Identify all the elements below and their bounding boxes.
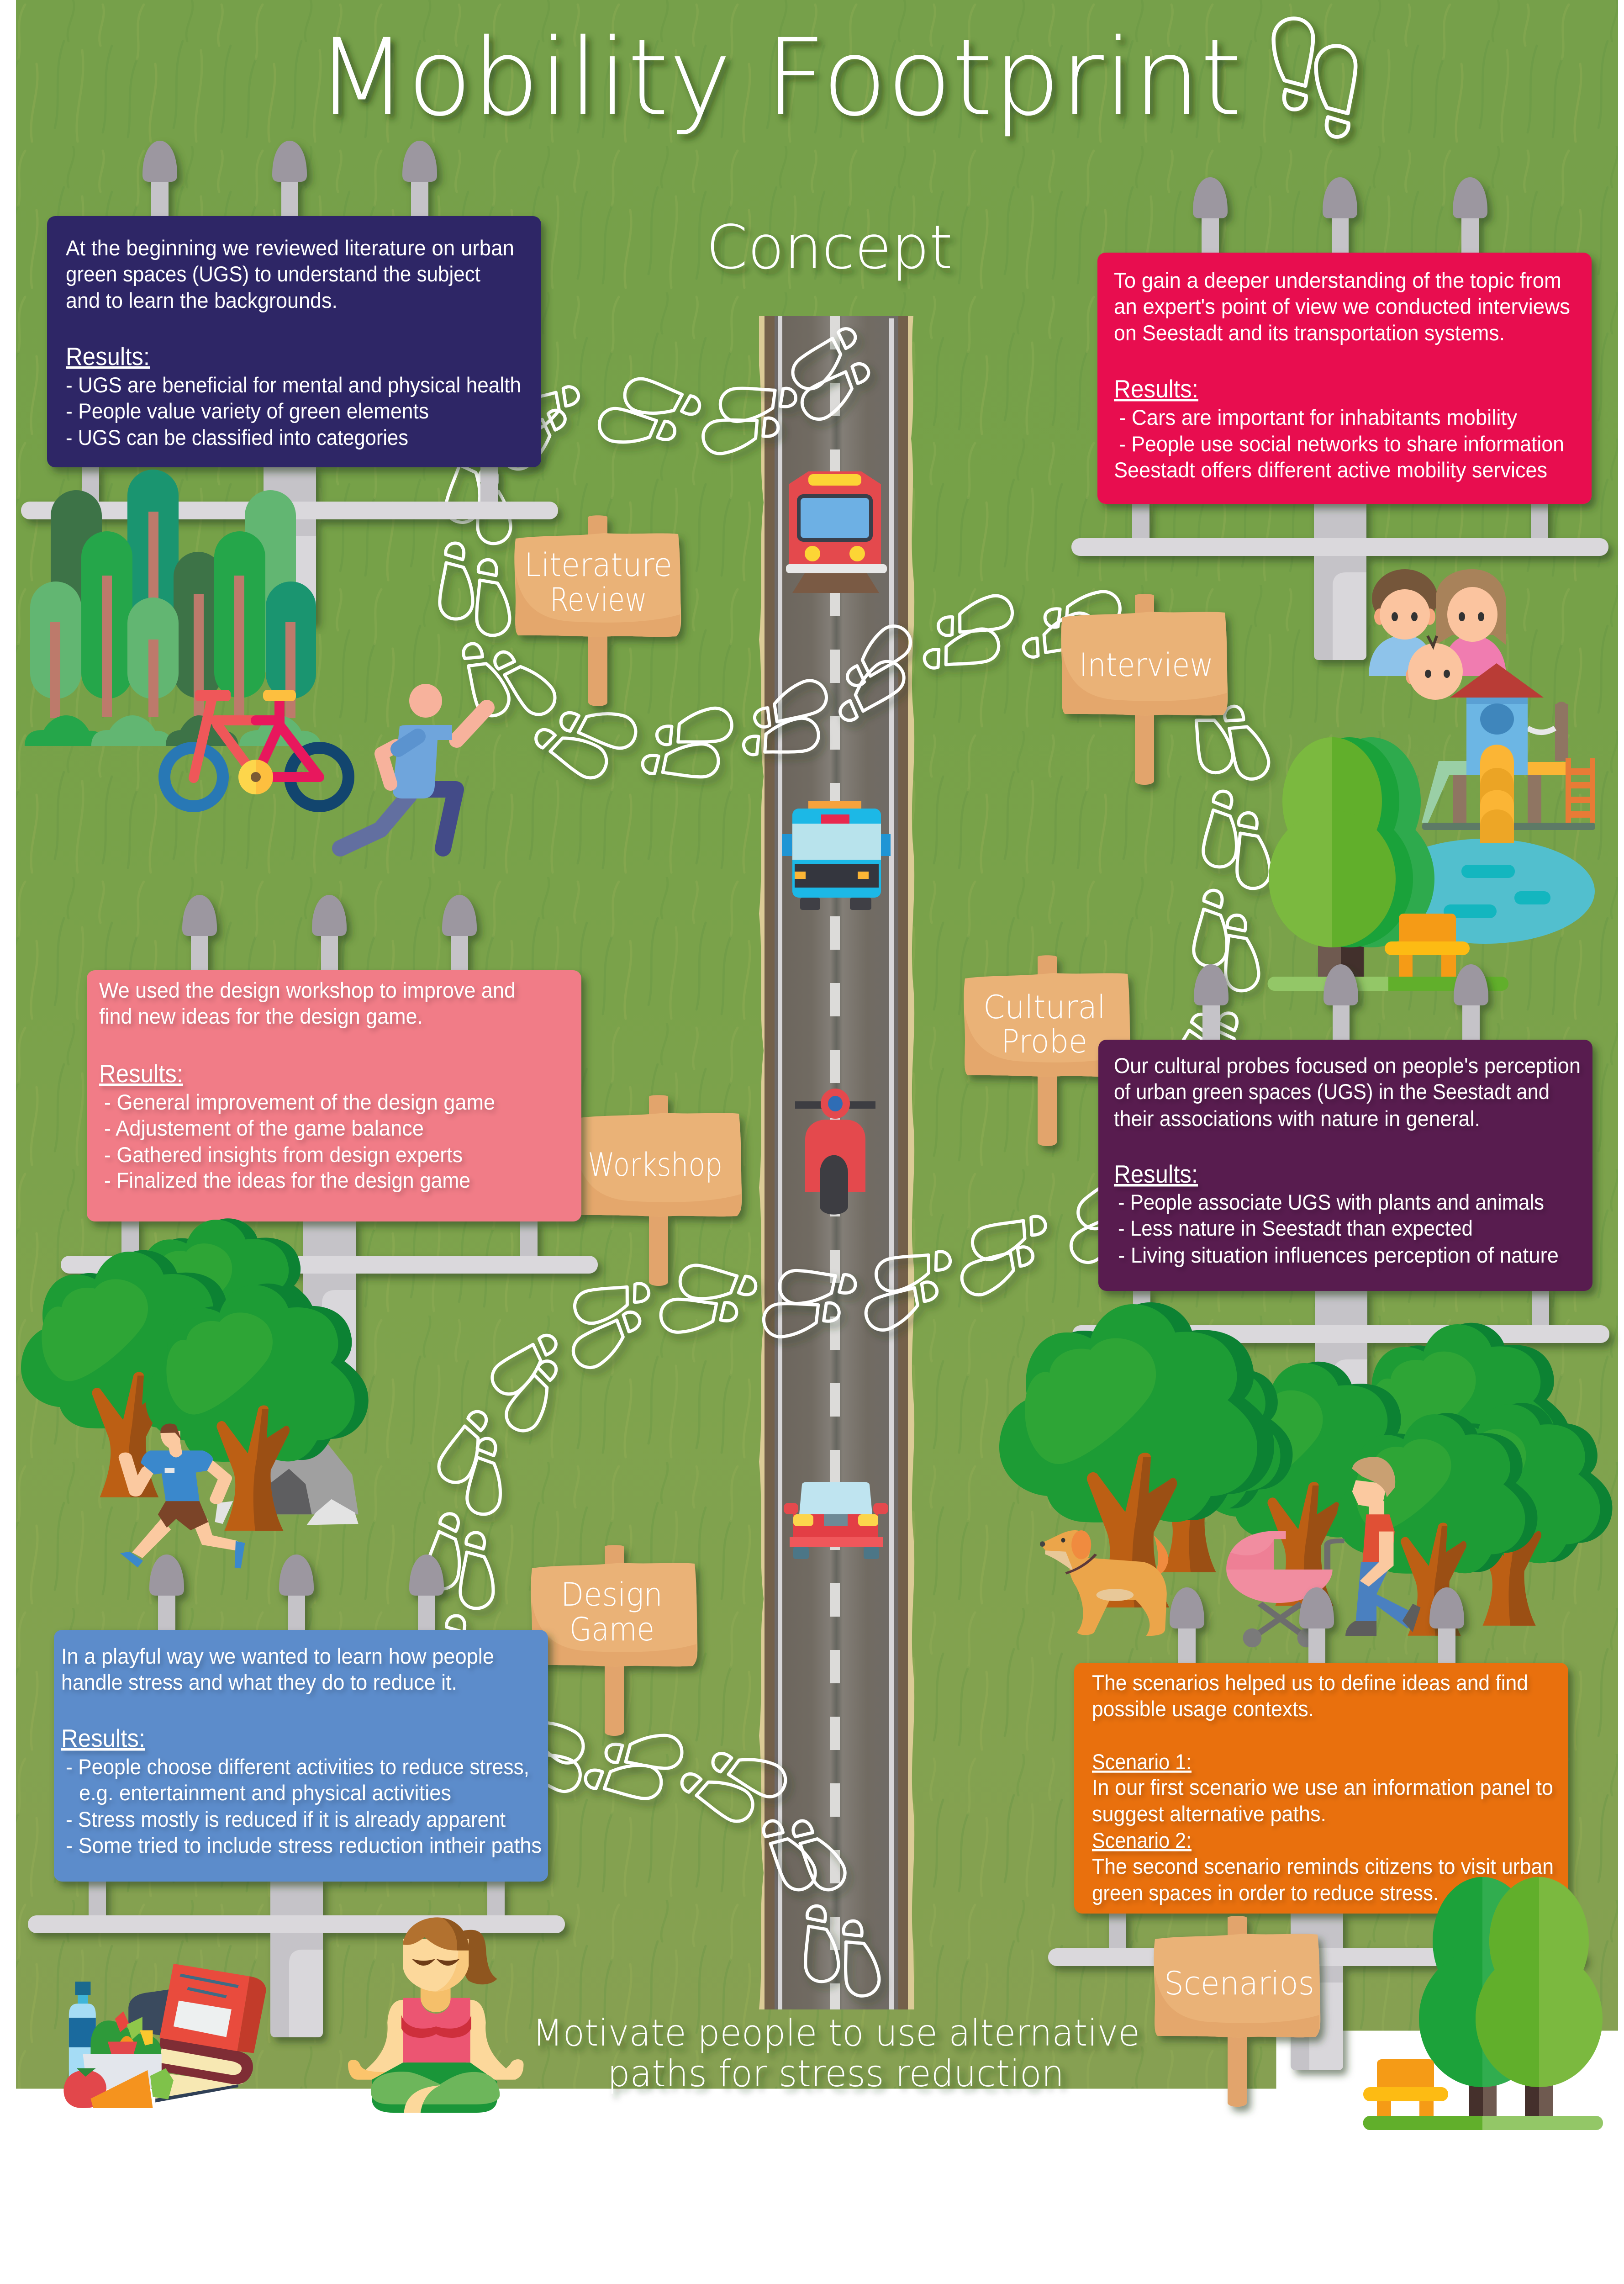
panel: cultural probe billboard: - People associate UGS with plants and animals (1118, 1190, 1544, 1214)
illustration: playground and lake (1376, 663, 1595, 944)
panel: interview billboard: on Seestadt and its transportation systems. (1114, 321, 1505, 345)
footer: logo aspern mobil LAB: LAB (1515, 2199, 1554, 2228)
sign: Cultural Probe (964, 955, 1130, 1146)
panel: literature billboard: - People value variety of green elements (66, 399, 429, 423)
illustration: meditating woman (348, 1917, 523, 2113)
panel: design game billboard: - Stress mostly is reduced if it is already apparent (66, 1807, 506, 1831)
panel: design game billboard: Results: (61, 1724, 145, 1752)
panel: design game billboard: e.g. entertainment and physical activities (79, 1781, 451, 1805)
sign: Workshop: Workshop (588, 1146, 722, 1184)
footer: logo aspern mobil LAB: mobil (1530, 2183, 1571, 2202)
footer: credits: Daniel Metzger, Felix Walcher, Philipp Klein, Jacopo Vullo (543, 2199, 1210, 2229)
panel: workshop billboard: find new ideas for the design game. (99, 1004, 423, 1028)
panel: workshop billboard: - Adjustement of the game balance (104, 1116, 424, 1140)
panel: cultural probe billboard: Results: (1114, 1160, 1198, 1188)
footprint trail (423, 320, 1273, 1998)
sign: Literature Review: Literature (524, 546, 672, 584)
illustration: family (1369, 569, 1506, 700)
panel: workshop billboard: - Finalized the ideas for the design game (104, 1168, 470, 1192)
panel: interview billboard: an expert's point of view we conducted interviews (1114, 294, 1570, 318)
panel: scenarios billboard: In our first scenario we use an information panel to (1092, 1775, 1553, 1799)
panel: design game billboard: In a playful way we wanted to learn how people (61, 1644, 494, 1668)
sign: Literature Review (514, 515, 681, 706)
panel: design game billboard: handle stress and what they do to reduce it. (61, 1670, 457, 1694)
illustration: runner (120, 1423, 245, 1568)
panel: scenarios billboard (1048, 1587, 1585, 2070)
sign: Design Game (531, 1545, 697, 1736)
panel: interview billboard (1071, 177, 1608, 660)
panel: literature billboard: green spaces (UGS) to understand the subject (66, 262, 480, 286)
footer: logo MDUR: R (418, 2150, 459, 2236)
panel: literature billboard: and to learn the backgrounds. (66, 288, 337, 312)
illustration: big tree and bench (1268, 737, 1508, 991)
illustration: dog, stroller and walker (1040, 1457, 1420, 1647)
sign: Design Game: Game (569, 1611, 654, 1648)
illustration: forest (25, 470, 321, 746)
footer: logo aspern mobil LAB: aspern (1508, 2172, 1543, 2186)
illustration: trees and rocks with runner (21, 1218, 369, 1568)
footer: logo MDUR (233, 2136, 459, 2265)
illustration: dog (1040, 1530, 1168, 1636)
illustration: stroller (1226, 1531, 1345, 1647)
panel: cultural probe billboard (1072, 964, 1609, 1447)
panel: literature billboard: - UGS can be classified into categories (66, 425, 408, 449)
panel: interview billboard: - Cars are important for inhabitants mobility (1119, 405, 1517, 429)
heading: title: Mobility Footprint (316, 16, 1242, 139)
panel: interview billboard: Seestadt offers different active mobility services (1114, 458, 1547, 482)
sign: Literature Review: Review (550, 581, 647, 619)
panel: scenarios billboard: The scenarios helped us to define ideas and find (1092, 1671, 1528, 1695)
road (759, 316, 914, 2009)
heading: Concept: Concept (706, 212, 953, 283)
footer: logo MDUR: M (233, 2178, 285, 2264)
illustration: bottom right trees and bench (1363, 1877, 1603, 2130)
panel: cultural probe billboard: their associations with nature in general. (1114, 1106, 1480, 1131)
illustration: group of trees (999, 1302, 1612, 1636)
tagline: paths for stress reduction (607, 2052, 1064, 2095)
footer: logo TU Wien: TU (37, 2158, 112, 2221)
footer: logo TU Wien (32, 2158, 117, 2244)
panel: workshop billboard: - General improvement of the design game (104, 1090, 495, 1114)
sign: Cultural Probe: Probe (1001, 1023, 1087, 1060)
panel: interview billboard: Results: (1114, 375, 1198, 403)
sign: Interview (1061, 594, 1228, 785)
panel: scenarios billboard: possible usage contexts. (1092, 1697, 1314, 1721)
panel: workshop billboard: - Gathered insights from design experts (104, 1142, 463, 1167)
panel: interview billboard: To gain a deeper understanding of the topic from (1114, 268, 1561, 292)
illustration: person stretching (340, 684, 487, 848)
panel: workshop billboard (61, 895, 598, 1378)
icon: title footprints (1274, 18, 1355, 137)
vehicle: truck (782, 801, 891, 910)
sign: Scenarios (1154, 1916, 1320, 2107)
panel: workshop billboard: We used the design workshop to improve and (99, 978, 516, 1002)
panel: interview billboard: - People use social networks to share information (1119, 432, 1564, 456)
sign: Design Game: Design (561, 1576, 663, 1613)
panel: design game billboard: - Some tried to include stress reduction intheir paths (66, 1833, 542, 1857)
footer: logo MDUR: D (295, 2136, 352, 2248)
tagline: Motivate people to use alternative (533, 2012, 1140, 2054)
panel: scenarios billboard: green spaces in order to reduce stress. (1092, 1881, 1439, 1905)
illustration: books and food (63, 1964, 266, 2108)
footer: logo exclamation mark (134, 2154, 219, 2251)
panel: literature billboard: Results: (66, 342, 150, 370)
panel: cultural probe billboard: - Less nature in Seestadt than expected (1118, 1216, 1473, 1240)
sign: Interview: Interview (1079, 646, 1213, 684)
tagline (533, 2012, 1140, 2095)
panel: scenarios billboard: suggest alternative paths. (1092, 1802, 1326, 1826)
illustration: bicycle (164, 690, 348, 806)
footer: logo aspern mobil LAB (1468, 2151, 1594, 2252)
footer: logo MDUR: U (364, 2178, 407, 2265)
panel: literature billboard (21, 141, 558, 624)
panel: literature billboard: At the beginning we reviewed literature on urban (66, 236, 514, 260)
footer: logo exclamation mark: ! (162, 2154, 190, 2251)
sign: Scenarios: Scenarios (1164, 1965, 1314, 2002)
panel: cultural probe billboard: Our cultural probes focused on people's perception (1114, 1053, 1581, 1078)
panel: design game billboard (28, 1554, 565, 2037)
panel: literature billboard: - UGS are beneficial for mental and physical health (66, 373, 521, 397)
panel: design game billboard: - People choose different activities to reduce stress, (66, 1755, 529, 1779)
panel: cultural probe billboard: of urban green spaces (UGS) in the Seestadt and (1114, 1079, 1550, 1104)
sign: Cultural Probe: Cultural (983, 989, 1106, 1026)
vehicle: tram (786, 471, 887, 593)
panel: scenarios billboard: Scenario 1: (1092, 1750, 1192, 1774)
footer: credits (543, 2164, 1210, 2229)
road centre dashes (830, 316, 840, 2009)
sign: Workshop (575, 1095, 742, 1286)
vehicle: car (784, 1482, 888, 1559)
illustration: walker (1345, 1457, 1420, 1636)
panel: workshop billboard: Results: (99, 1059, 183, 1088)
panel: scenarios billboard: Scenario 2: (1092, 1828, 1192, 1852)
vehicle: scooter (795, 1089, 875, 1215)
footer: logo TU Wien: WIEN (39, 2215, 111, 2242)
footer: credits: Design Thinking: Ideation | 187.B09 (543, 2164, 960, 2195)
panel: scenarios billboard: The second scenario reminds citizens to visit urban (1092, 1854, 1554, 1878)
panel: cultural probe billboard: - Living situation influences perception of nature (1118, 1243, 1559, 1267)
